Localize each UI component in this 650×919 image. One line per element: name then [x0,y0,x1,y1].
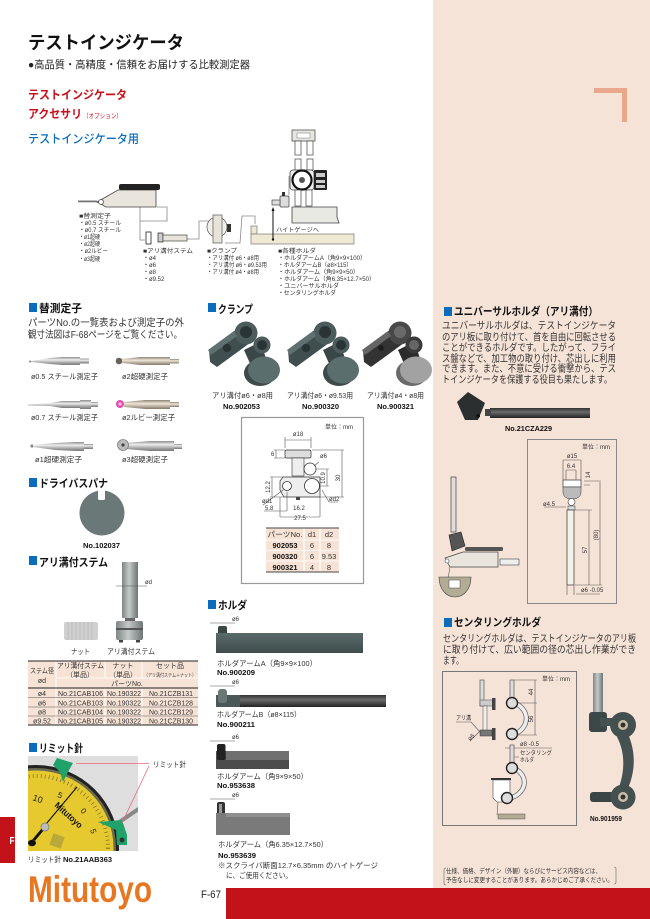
probe: 2 ruby [116,400,179,422]
heading: クランプ [218,303,253,316]
description: ことができるホルダです。したがって、フライ [442,341,616,354]
panel: centering holder dimensions [442,672,576,826]
caption [28,854,112,864]
table: clamp sizes: 8 [327,541,331,550]
table: clamp sizes: 6 [310,552,314,561]
list: holders: ・ホルダアームB（ø8×115） [278,261,352,269]
description: ユニバーサルホルダは、テストインジケータ [442,319,616,332]
drawing: dimensions: 6.4 [567,464,576,470]
subtitle: ●高品質・高精度・信頼をお届けする比較測定器 [28,58,250,71]
arm A: ホルダアームA（角9×9×100） [217,658,317,668]
drawing: side view: アリ溝 [456,714,471,722]
photo: universal holder [457,392,590,420]
list: dovetail stems [143,247,193,283]
drawing: dimensions: ø6 -0.05 [581,588,604,594]
disclaimer: 仕様、価格、デザイン（外観）ならびにサービス内容などは、 [446,866,601,875]
list: holders: ・ホルダアーム（角6.35×12.7×50） [278,275,375,283]
arm short square: No.953638 [217,781,255,790]
panel: clamps [208,303,432,584]
table: stem part numbers: No.190322 [107,710,141,716]
arm short flat [210,793,328,860]
drawing: dimensions: ø18 [293,432,304,438]
captions: ナット [71,647,90,656]
illustration: holder in use [439,477,519,597]
list: holders [278,247,375,297]
drawing: front view [506,680,537,740]
drawing: dimensions: (80) [594,530,600,540]
note: に、ご使用ください。 [226,870,292,880]
panel: dovetail stem [28,555,198,726]
list: holders: ・センタリングホルダ [278,289,336,297]
table: stem part numbers: ø6 [38,700,46,708]
panel: holders [208,598,386,880]
description: ます。 [443,655,463,667]
drawing: holder profile [563,480,581,595]
arm B: ホルダアームB（ø8×115） [217,709,301,719]
part number: No.102037 [83,541,120,550]
drawing: dimensions: 14 [586,471,592,478]
panel: universal holder dimensions: 単位：mm [582,443,610,451]
icon: test indicator [78,184,160,207]
probe: 0.5 steel [29,357,98,381]
heading: blue subcategory: テストインジケータ用 [28,132,139,146]
list: measuring probes: ■替測定子 [79,212,111,220]
heading: red category [28,88,127,121]
table: stem part numbers: ø8 [38,710,46,716]
caption: No.21AAB363 [63,855,112,864]
arm short square [210,735,308,790]
drawing: in use [491,742,552,819]
table: stem part numbers: （単品） [66,670,94,679]
description: ス盤などで、加工物の取り付け、芯出しに利用 [442,352,616,365]
table: clamp sizes: 9.53 [322,552,336,561]
table: clamp sizes: 900321 [272,563,298,572]
table: stem part numbers: No.190322 [107,700,141,708]
table: stem part numbers: No.21CZB128 [149,700,193,708]
table: stem part numbers: セット品 [156,662,184,670]
probe: 2 ruby: ø2ルビー測定子 [122,412,175,422]
description [442,319,616,386]
table: stem part numbers: （単品） [109,670,137,679]
list: clamps: ■クランプ [207,248,237,255]
heading: リミット針 [39,741,83,755]
captions: アリ溝付ø6・ø8用 [212,390,273,400]
photo: dial with limit needles: Mitutoyo [53,800,85,831]
drawing: dimensions: ød2 [329,497,340,503]
icon: height gauge [272,130,339,223]
page number: F-67 [201,889,221,901]
description [443,632,636,667]
probe: 3 carbide: ø3超硬測定子 [122,454,168,464]
table: stem part numbers: No.21CZB129 [149,710,193,716]
callout label: リミット針 [153,759,186,769]
list: measuring probes: ・ø2ルビー [79,247,108,255]
arm A [210,617,363,677]
logo: Mitutoyo: Mitutoyo [28,869,152,910]
corner mark [594,88,627,122]
captions: アリ溝付ø4・ø8用 [367,390,424,400]
table: stem part numbers: ø4 [38,691,46,698]
drawing: dimensions [543,454,604,594]
probe: 3 carbide [118,440,182,464]
heading: 替測定子 [39,301,82,315]
disclaimer: 予告なしに変更することがあります。あらかじめご了承ください。 [446,875,613,884]
drawing: side view [456,680,496,742]
section tab F [0,817,15,863]
table: stem part numbers: ø9.52 [33,718,51,726]
icon: clamp [207,215,231,243]
heading: ドライバスパナ [39,477,108,490]
probe: 0.7 steel [28,400,98,422]
disclaimer [444,866,616,885]
table: clamp sizes: パーツNo. [268,530,302,539]
table: stem part numbers: No.21CZB130 [149,718,193,726]
captions: No.902053 [223,402,260,411]
table: stem part numbers [28,661,198,726]
caption: リミット針 [28,854,61,864]
drawing: dimensions [262,432,344,522]
drawing: dimensions: 30 [336,474,342,481]
table: clamp sizes: 8 [327,563,331,572]
icon: dovetail stem [146,232,187,244]
panel: centering holder [442,615,636,826]
drawing: dimensions: ø6 [320,454,328,460]
heading: ユニバーサルホルダ（アリ溝付） [454,304,598,318]
photo: dial with limit needles: 10 [31,792,44,805]
panel: clamp dimension drawing: 単位：mm [325,423,353,431]
captions [71,646,155,656]
photo: clamp 902053 [208,322,280,386]
table: clamp sizes [266,528,339,572]
description: 観寸法図はF-68ページをご覧ください。 [28,328,182,341]
part number: No.901959 [590,814,622,823]
table: stem part numbers: No.21CAB103 [58,700,103,708]
heading: センタリングホルダ [454,615,541,629]
panel: replacement probes [28,301,184,464]
dimension: stem diameter [116,580,152,586]
arrow: to height gauge [272,207,274,241]
table: stem part numbers: パーツNo. [111,680,143,688]
heading: red category: アクセサリ [28,107,82,121]
table: stem part numbers: （アリ溝付ステム＋ナット） [144,672,196,679]
table: stem part numbers: ナット [112,662,134,670]
drawing: dimensions: 57 [583,546,589,553]
photo: dial with limit needles: 5 [56,790,64,801]
panel: driver spanner [29,477,124,550]
list: measuring probes: ・ø0.7 スチール [79,227,121,234]
drawing: front view: 44 [529,688,535,695]
photo: dial with limit needles [28,756,138,851]
list: measuring probes [79,212,121,263]
list: measuring probes: ・ø0.5 スチール [79,220,121,227]
arm short flat: No.953639 [218,851,256,860]
list: dovetail stems: ■アリ溝付ステム [143,247,193,255]
table: clamp sizes: d1 [308,530,316,539]
list: clamps: ・アリ溝付 ø6・ø9.53用 [207,261,267,269]
heading: red category: （オプション） [83,112,122,120]
table: clamp sizes: d2 [325,530,333,539]
panel: clamp dimension drawing [242,418,364,584]
photo: dial with limit needles: 0 [78,807,89,816]
drawing: dimensions: 16.2 [293,506,305,512]
heading [208,598,247,612]
list: clamps [207,248,267,276]
arm short square: ø6 [232,735,240,741]
drawing: dimensions: ø4.5 [543,502,556,508]
arm B: No.900211 [217,720,255,729]
probe: 2 carbide: ø2超硬測定子 [122,371,168,381]
probe: 0.7 steel: ø0.7 スチール測定子 [31,412,98,422]
list: dovetail stems: ・ø8 [143,270,157,276]
drawing: clamp outline [280,450,320,500]
connector lines [140,207,255,243]
captions: No.900320 [302,402,339,411]
arm short flat: ø6 [232,793,240,799]
title: テストインジケータ [28,33,184,53]
panel: universal holder dimensions [528,440,616,604]
table: stem part numbers: ød [38,678,46,685]
table: stem part numbers: No.21CAB105 [58,718,103,726]
heading [29,741,83,755]
table: stem part numbers: ステム径 [30,666,54,675]
list: dovetail stems: ・ø9.52 [143,277,165,283]
description: パーツNo.の一覧表および測定子の外 [28,316,184,329]
probe: 1 carbide: ø1超硬測定子 [35,454,82,464]
note: ※スクライバ断面12.7×6.35mm のハイトゲージ [218,860,378,870]
photo: centering holder [589,673,636,810]
arm B: ø6 [232,680,240,686]
list: clamps: ・アリ溝付 ø6・ø8用 [207,254,259,262]
drawing: dimensions: 5.8 [265,506,274,512]
photo: spanner disc [80,489,124,536]
photo: nut [64,622,98,640]
list: measuring probes: ・ø1超硬 [79,233,100,241]
table: stem part numbers: No.190322 [107,718,141,726]
description: できます。また、不意に受ける衝撃から、テス [442,362,616,375]
system diagram [78,130,375,297]
label: to height gauge: ハイトゲージへ [276,226,319,234]
table: clamp sizes: 900320 [272,552,298,561]
table: clamp sizes: 4 [310,563,314,572]
probe: 1 carbide [30,442,93,464]
photo: clamp 900320 [287,322,359,386]
probe: 0.5 steel: ø0.5 スチール測定子 [31,371,98,381]
list: dovetail stems: ・ø4 [143,256,157,262]
heading [29,555,108,569]
heading [208,303,253,316]
arm B [210,680,386,729]
arm A: ø6 [232,617,240,623]
arm short square: ホルダアーム（角9×9×50） [217,771,308,781]
table: stem part numbers: No.21CAB104 [58,710,103,716]
drawing: dimensions: 27.5 [294,516,306,522]
list: holders: ・ユニバーサルホルダ [278,282,339,290]
list: dovetail stems: ・ø6 [143,263,157,269]
table: stem part numbers: No.21CAB106 [58,691,103,698]
arm A: No.900209 [217,668,255,677]
table: stem part numbers: No.21CZB131 [149,691,193,698]
heading: アリ溝付ステム [39,555,108,569]
heading [29,301,82,315]
drawing: dimensions: 6 [271,452,275,458]
part number: No.21CZA229 [505,424,552,433]
drawing: in use: ø8 -0.5 [520,742,540,748]
probe: 2 carbide [116,357,179,381]
description: のアリ板に取り付けて、首を自由に回転させる [442,330,616,344]
captions: アリ溝付ステム [107,646,155,656]
description [28,316,184,341]
captions: No.900321 [377,402,414,411]
list: holders: ・ホルダアーム（角9×9×50） [278,268,359,276]
table: stem part numbers: アリ溝付ステム [57,661,104,670]
drawing: dimensions: 12.2 [266,481,272,493]
list: measuring probes: ・ø3超硬 [79,255,100,263]
photo: clamp 900321 [362,322,432,386]
drawing: dimensions: ø15 [567,454,578,460]
panel: limit needle [28,742,186,863]
panel: universal holder [439,304,616,604]
list: holders: ・ホルダアームA（角9×9×100） [278,254,366,262]
list: holders: ■各種ホルダ [278,247,316,255]
drawing: front view: 56 [529,715,535,722]
panel: centering holder dimensions: 単位：mm [542,675,570,683]
description: トインジケータを保護する役目も果たします。 [442,373,612,386]
icon: holder arm [251,226,354,244]
photo: dial with limit needles: 5 [88,828,98,835]
drawing: dimensions: 10.9 [321,472,327,484]
captions: アリ溝付ø6・ø9.53用 [287,390,353,400]
dimension: stem diameter: ød [145,580,152,586]
list: measuring probes: ・ø2超硬 [79,240,100,248]
arm short flat: ホルダアーム（角6.35×12.7×50） [218,839,328,849]
drawing: in use: センタリング [520,749,552,757]
heading: red category: テストインジケータ [28,88,127,102]
drawing: dimensions: ød1 [262,499,273,505]
heading: ホルダ [218,598,247,612]
photo: stem [116,562,143,642]
heading [444,615,541,629]
table: clamp sizes: 6 [310,541,314,550]
drawing: in use: ホルダ [520,756,534,764]
drawing: side view: ø6 [467,733,477,742]
table: stem part numbers: No.190322 [107,691,141,698]
section tab F: F [10,836,14,847]
table: clamp sizes: 902053 [272,541,298,550]
note [218,860,378,880]
footer bar [226,888,650,919]
callout lines [76,764,149,823]
list: clamps: ・アリ溝付 ø4・ø8用 [207,268,259,276]
captions [212,390,424,411]
